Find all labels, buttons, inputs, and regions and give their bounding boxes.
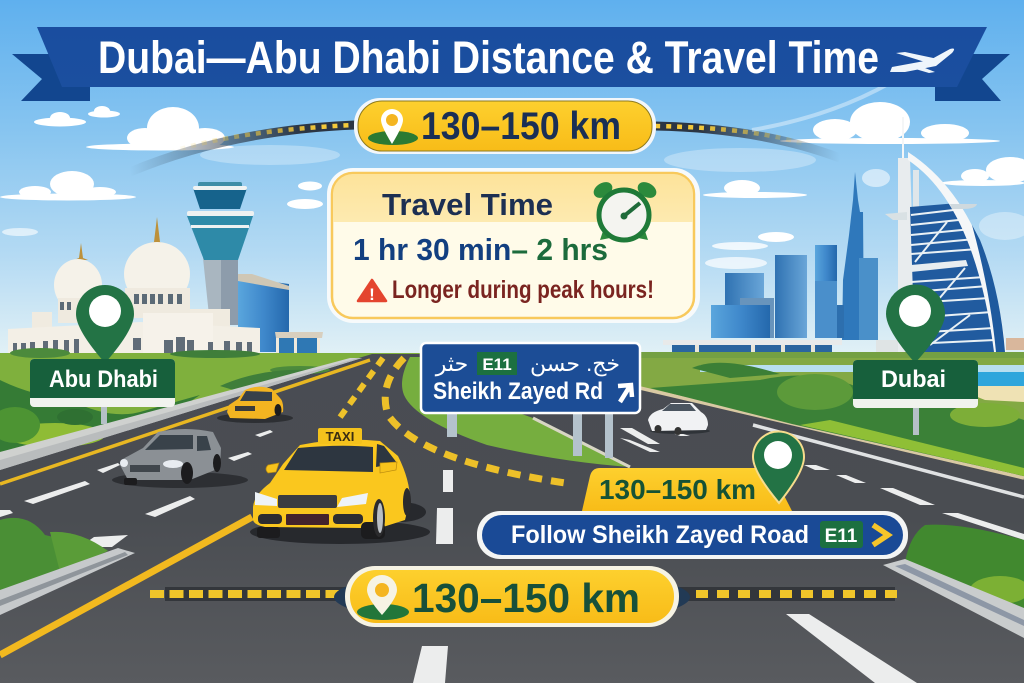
icon: pin [753, 432, 804, 503]
ground: fields left and right [0, 352, 1024, 483]
distance text: 130–150 km [599, 474, 756, 505]
sign arrow [618, 385, 632, 402]
icon: green pin [886, 285, 945, 363]
sign arabic text right: خج. حسن [530, 351, 620, 377]
grass median [402, 357, 630, 467]
yellow car far [217, 387, 293, 423]
icon: green pin [76, 285, 134, 363]
label: Dubai [881, 366, 946, 393]
E11 shield [477, 352, 517, 375]
white car right [648, 403, 710, 435]
icon: pin [357, 575, 409, 620]
top distance badge [354, 98, 656, 154]
warning icon: ! [369, 285, 375, 304]
Abu Dhabi marker [30, 285, 175, 424]
title text: Dubai—Abu Dhabi Distance & Travel Time [98, 32, 879, 83]
highway sign [421, 343, 640, 458]
label: Abu Dhabi [49, 366, 158, 393]
taxi foreground [250, 428, 430, 544]
airplane trail [752, 74, 905, 130]
distance text: 130–150 km [421, 105, 621, 148]
bottom distance badge [334, 566, 690, 627]
clouds [0, 102, 1024, 269]
warning icon [358, 280, 386, 304]
left upper bushes and kerb [0, 348, 362, 470]
distance text: 130–150 km [412, 575, 640, 621]
E11 shield [820, 521, 863, 548]
left lower island [0, 518, 135, 615]
sky background [0, 0, 1024, 365]
icon: alarm clock [591, 179, 659, 240]
right bushes and kerb [650, 363, 1024, 638]
icon: airplane [890, 48, 954, 73]
road markings [0, 358, 1024, 683]
Abu Dhabi landmark: mosque and tower [8, 182, 323, 358]
left ribbon tail [12, 54, 90, 101]
road distance tag with pin [582, 432, 804, 511]
right ribbon tail [935, 54, 1010, 101]
E11 shield: E11 [482, 355, 512, 374]
travel time card [327, 168, 700, 323]
E11 shield: E11 [825, 526, 858, 547]
icon: location pin on green [368, 109, 418, 145]
taxi roof sign [318, 428, 362, 444]
arc road with distance dashes [130, 125, 840, 172]
road surface [0, 354, 1024, 683]
Dubai landmark: skyline and Burj Al Arab [663, 117, 1024, 356]
title banner [12, 27, 1010, 101]
card heading: Travel Time [382, 187, 553, 222]
travel duration: 1 hr 30 min– 2 hrs [353, 232, 608, 267]
silver car [112, 429, 248, 488]
route banner [477, 511, 908, 559]
Dubai marker [853, 285, 978, 435]
warning text: Longer during peak hours! [392, 276, 654, 304]
sign arabic text: حثر [435, 351, 468, 377]
sign road name: Sheikh Zayed Rd [433, 378, 603, 405]
chevron [873, 525, 888, 545]
bottom dashed distance lines [150, 587, 903, 601]
taxi roof sign: TAXI [326, 429, 354, 444]
route text: Follow Sheikh Zayed Road [511, 521, 809, 549]
